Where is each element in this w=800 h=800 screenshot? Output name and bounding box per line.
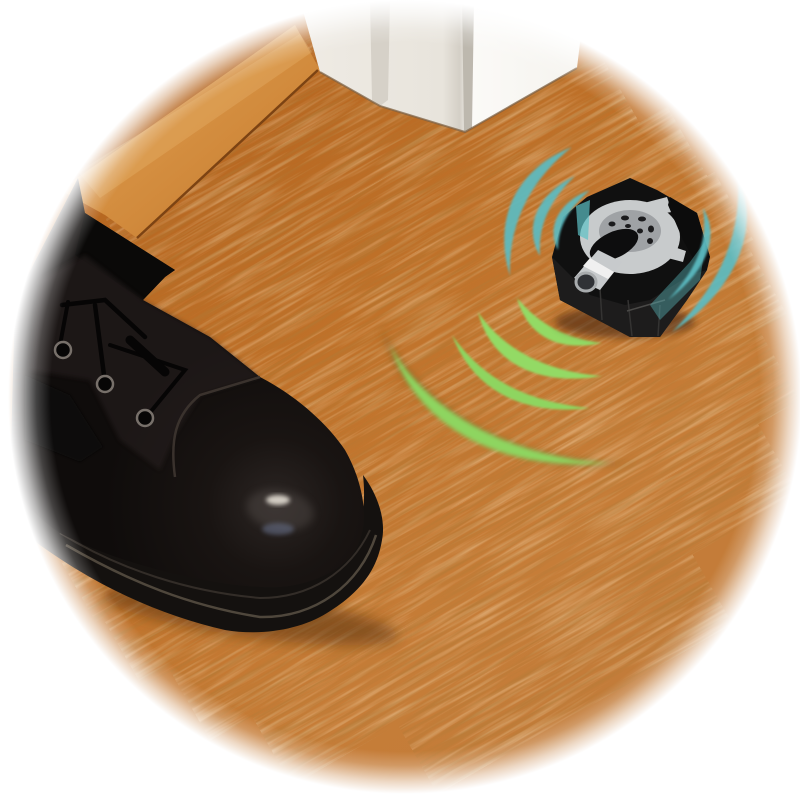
lace tab bbox=[75, 213, 175, 300]
black lens mount bbox=[585, 222, 643, 268]
sensor device bbox=[552, 178, 710, 338]
boot upper bbox=[10, 178, 364, 587]
laces bbox=[60, 300, 185, 415]
boot bbox=[10, 178, 402, 658]
teal vibration arcs bbox=[504, 147, 747, 332]
boot side mesh panel bbox=[25, 375, 103, 462]
grey sensor plate bbox=[580, 200, 680, 274]
device shadow bbox=[555, 306, 695, 338]
boot shadow bbox=[98, 572, 402, 658]
wood baseboard trim bbox=[60, 25, 320, 238]
black guard arc bbox=[668, 197, 710, 262]
eyelets bbox=[55, 342, 153, 426]
white door frame post bbox=[300, 0, 585, 132]
silver lens barrel bbox=[574, 250, 622, 291]
toe cap highlight bbox=[243, 484, 317, 536]
device body bbox=[552, 178, 710, 337]
teal tints over device bbox=[576, 200, 590, 240]
green vibration arcs bbox=[380, 298, 640, 465]
upper lace panel bbox=[30, 255, 260, 470]
boot sole bbox=[20, 475, 383, 632]
